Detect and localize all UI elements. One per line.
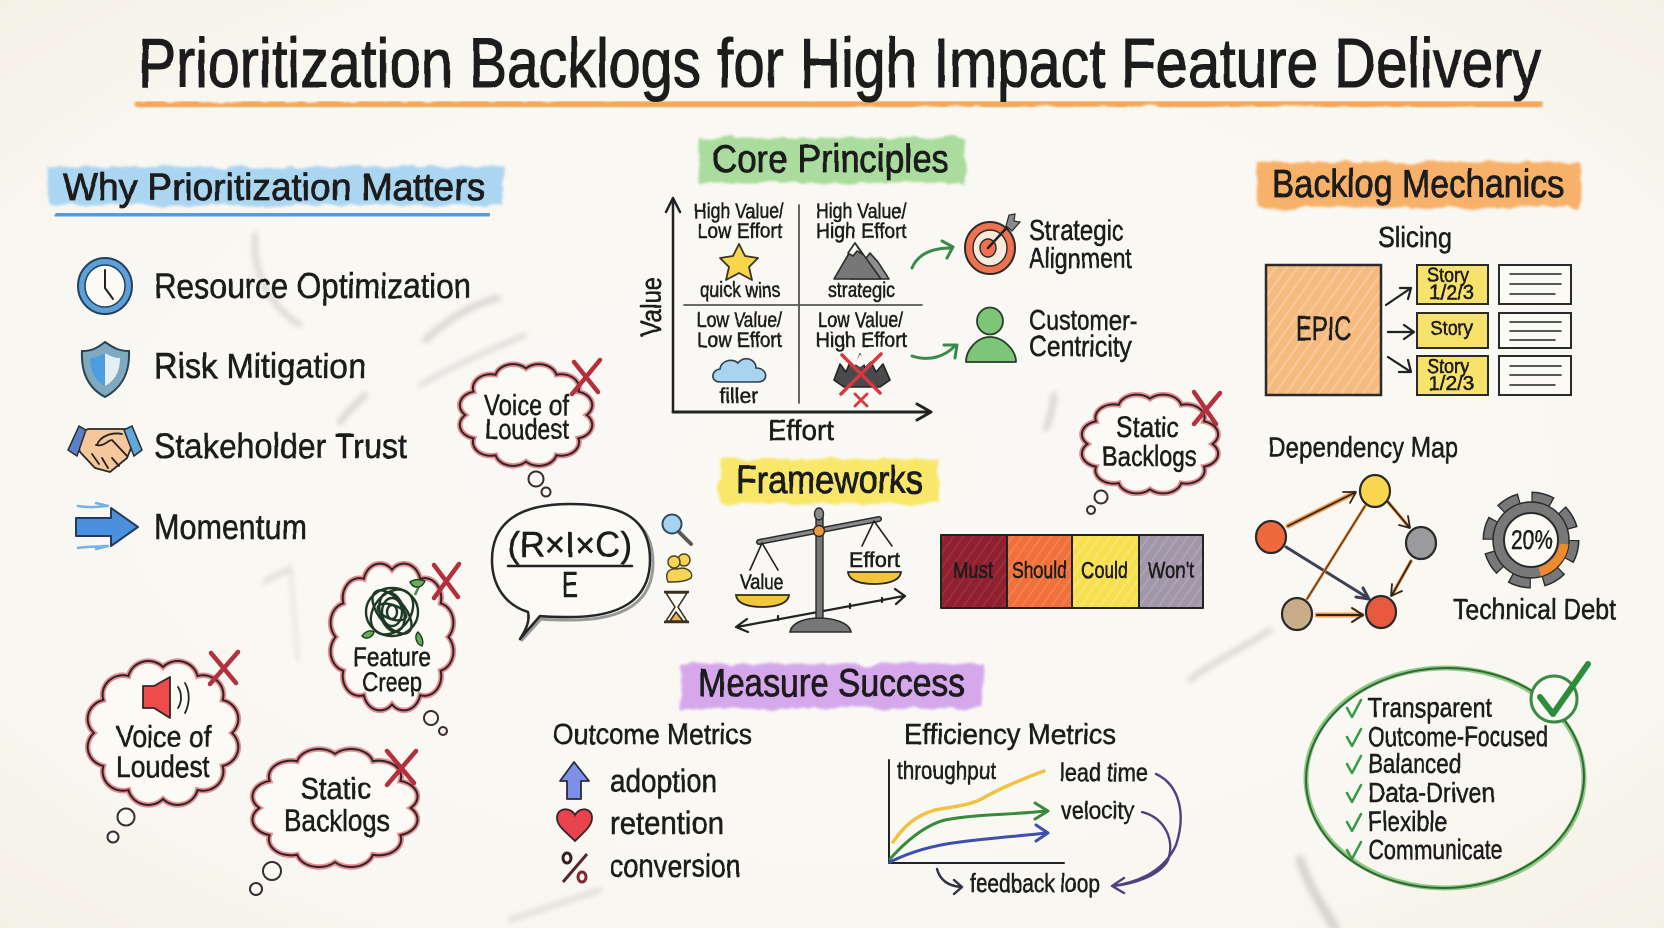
arrow: to strategic alignment (912, 241, 953, 268)
slicing arrows (1386, 288, 1414, 372)
label: efficiency metrics: Efficiency Metrics (904, 719, 1116, 751)
speech bubble: rice formula: E (562, 564, 578, 605)
panel: backlog mechanics (1256, 162, 1616, 630)
metric: conversion: conversion (610, 848, 741, 884)
cloud text: static backlogs: Static (300, 771, 371, 806)
quadrant: high value low effort: quick wins (700, 279, 780, 302)
story cards: Story (1427, 356, 1469, 378)
icon: gear technical debt: 20% (1511, 525, 1553, 555)
checklist: Flexible (1368, 806, 1447, 837)
icon: cloud (713, 359, 766, 382)
cloud text: feature creep: Feature (353, 642, 431, 672)
heading highlight purple (681, 664, 983, 708)
green hand-drawn circle (1302, 663, 1588, 893)
quadrant: low value low effort: Low Value/ (697, 309, 782, 332)
title (138, 24, 1541, 106)
document cards (1499, 265, 1571, 395)
heading highlight green (699, 138, 965, 183)
thought cloud: static backlogs lower (250, 749, 418, 895)
cloud text: voice of loudest: Loudest (116, 749, 210, 784)
cloud text: static backlogs: Backlogs (1102, 441, 1197, 473)
quadrant: high value high effort: High Effort (816, 220, 907, 243)
label: outcome metrics: Outcome Metrics (553, 719, 752, 751)
story cards: 1/2/3 (1429, 373, 1474, 395)
moscow bar (941, 535, 1203, 608)
label: strategic alignment (1029, 215, 1132, 275)
icon: people (667, 554, 692, 582)
heading highlight orange (1257, 162, 1581, 208)
checklist: Balanced (1368, 748, 1461, 779)
icon: momentum arrow (76, 503, 138, 549)
icon: mountains (834, 243, 889, 279)
cloud text: static backlogs: Backlogs (284, 803, 390, 838)
cloud text: voice of loudest (116, 719, 211, 784)
red cross (1194, 392, 1220, 424)
checklist: Data-Driven (1368, 777, 1495, 808)
checklist: Outcome-Focused (1368, 721, 1548, 752)
thought bubbles (424, 711, 447, 735)
item: stakeholder trust: Stakeholder Trust (154, 427, 407, 466)
thought cloud: voice of loudest lower (88, 652, 238, 842)
cloud text: voice of loudest: Loudest (485, 414, 569, 446)
moscow bar: Won't (1148, 557, 1194, 583)
heading underline blue (58, 214, 487, 216)
item: resource optimization: Resource Optimization (154, 267, 471, 306)
title underline (139, 102, 1538, 106)
thought cloud: feature creep (331, 564, 459, 735)
icon: handshake (68, 426, 142, 472)
moscow bar: Could (1081, 557, 1128, 583)
speech bubble: rice formula (492, 504, 653, 641)
story cards (1417, 265, 1488, 395)
moscow bar: Must (953, 557, 993, 583)
moscow bar: Should (1012, 557, 1067, 583)
line chart (889, 757, 1148, 863)
metric: adoption: adoption (610, 763, 717, 799)
heading: measure success: Measure Success (698, 662, 965, 705)
checklist: Transparent (1368, 692, 1492, 723)
quadrant: high value high effort (816, 200, 907, 302)
thought bubbles (528, 472, 550, 496)
epic box: EPIC (1296, 310, 1351, 348)
line chart: velocity (1061, 797, 1134, 825)
label: feedback loop: feedback loop (970, 868, 1100, 898)
line chart: throughput (897, 757, 996, 785)
red cross (210, 652, 238, 684)
icon: speaker (143, 677, 189, 718)
heading highlight yellow (720, 459, 939, 504)
icon: tangled vine (362, 580, 425, 646)
label: customer centricity: Customer- (1029, 305, 1137, 337)
cloud text: voice of loudest (484, 390, 570, 446)
label: dependency map: Dependency Map (1268, 432, 1458, 464)
thought cloud: static backlogs upper (1082, 392, 1220, 514)
axis label: value: Value (636, 277, 668, 337)
icon: up arrow (560, 762, 589, 799)
icon: star (720, 244, 758, 280)
cloud text: feature creep: Creep (362, 667, 422, 697)
red cross (387, 751, 416, 785)
panel: healthy backlog checklist (1302, 663, 1588, 893)
heading: core principles: Core Principles (712, 138, 949, 181)
thought bubbles (1087, 490, 1108, 514)
heading: frameworks: Frameworks (736, 459, 923, 502)
quadrant: high value high effort: strategic (828, 279, 895, 302)
dependency graph (1256, 475, 1436, 630)
line chart: lead time (1060, 759, 1148, 787)
label: slicing: Slicing (1378, 222, 1452, 254)
thought cloud: voice of loudest upper (460, 360, 600, 496)
icon: shield (82, 342, 129, 397)
icon: gear technical debt (1489, 498, 1573, 582)
icon: heart (557, 809, 592, 841)
quadrant: high value low effort: High Value/ (694, 200, 784, 223)
quadrant: low value low effort: Low Effort (697, 329, 782, 352)
quadrant: low value low effort (697, 309, 782, 408)
label: strategic alignment: Strategic (1029, 215, 1124, 247)
arrow: to customer centricity (912, 345, 957, 358)
checklist (1347, 692, 1548, 865)
thought bubbles (250, 862, 281, 895)
speech bubble: rice formula: (R×I×C) (508, 524, 632, 565)
icon: balance scale: Effort (849, 549, 900, 572)
icon: target (965, 214, 1020, 274)
cloud text: static backlogs: Static (1116, 412, 1179, 444)
cloud text: static backlogs (284, 771, 390, 838)
cloud text: voice of loudest: Voice of (484, 390, 570, 422)
icon: balance scale: Value (740, 571, 784, 594)
heading highlight blue (49, 167, 503, 205)
quadrant: high value low effort (694, 200, 784, 302)
item: risk mitigation: Risk Mitigation (154, 347, 366, 386)
icon: clock (78, 258, 132, 314)
thought bubbles (108, 808, 134, 842)
heading: why prioritization matters: Why Prioritization Matters (63, 167, 485, 209)
quadrant: high value high effort: High Value/ (816, 200, 906, 223)
story cards: Story (1427, 265, 1469, 287)
check badge (1531, 664, 1588, 722)
icon: balance scale (736, 508, 905, 632)
icon: percent (563, 853, 587, 882)
panel: why prioritization matters (49, 167, 503, 549)
feedback loop arrows (937, 774, 1181, 894)
red cross (434, 564, 459, 598)
cloud text: static backlogs (1102, 412, 1197, 473)
icon: crossed-out mountains (834, 354, 890, 406)
item: momentum: Momentum (154, 508, 307, 547)
label: customer centricity: Centricity (1029, 331, 1132, 363)
story cards: Story (1430, 318, 1473, 340)
quadrant: low value high effort: Low Value/ (818, 309, 903, 332)
checklist: Communicate (1368, 834, 1503, 865)
panel: core principles (636, 138, 1137, 447)
quadrant: low value high effort: High Effort (816, 329, 907, 352)
icon: hourglass (664, 592, 689, 622)
panel: frameworks (492, 459, 1203, 641)
cloud text: voice of loudest: Voice of (116, 719, 211, 754)
red cross (572, 360, 600, 394)
cloud text: feature creep (353, 642, 431, 697)
label: technical debt: Technical Debt (1453, 594, 1616, 626)
heading: backlog mechanics: Backlog Mechanics (1272, 163, 1564, 206)
panel: measure success (553, 662, 1181, 898)
label: customer centricity (1029, 305, 1137, 363)
quadrant: low value low effort: filler (720, 385, 758, 408)
icon: person (966, 308, 1016, 362)
matrix axes (666, 198, 931, 420)
axis label: effort: Effort (768, 415, 834, 447)
icon: magnifier (662, 514, 691, 544)
epic box (1266, 265, 1381, 395)
quadrant: low value high effort (816, 309, 907, 406)
metric: retention: retention (610, 805, 724, 841)
story cards: 1/2/3 (1429, 282, 1474, 304)
label: strategic alignment: Alignment (1029, 243, 1132, 275)
quadrant: high value low effort: Low Effort (697, 220, 782, 243)
faint pencil smudges (255, 235, 1335, 928)
